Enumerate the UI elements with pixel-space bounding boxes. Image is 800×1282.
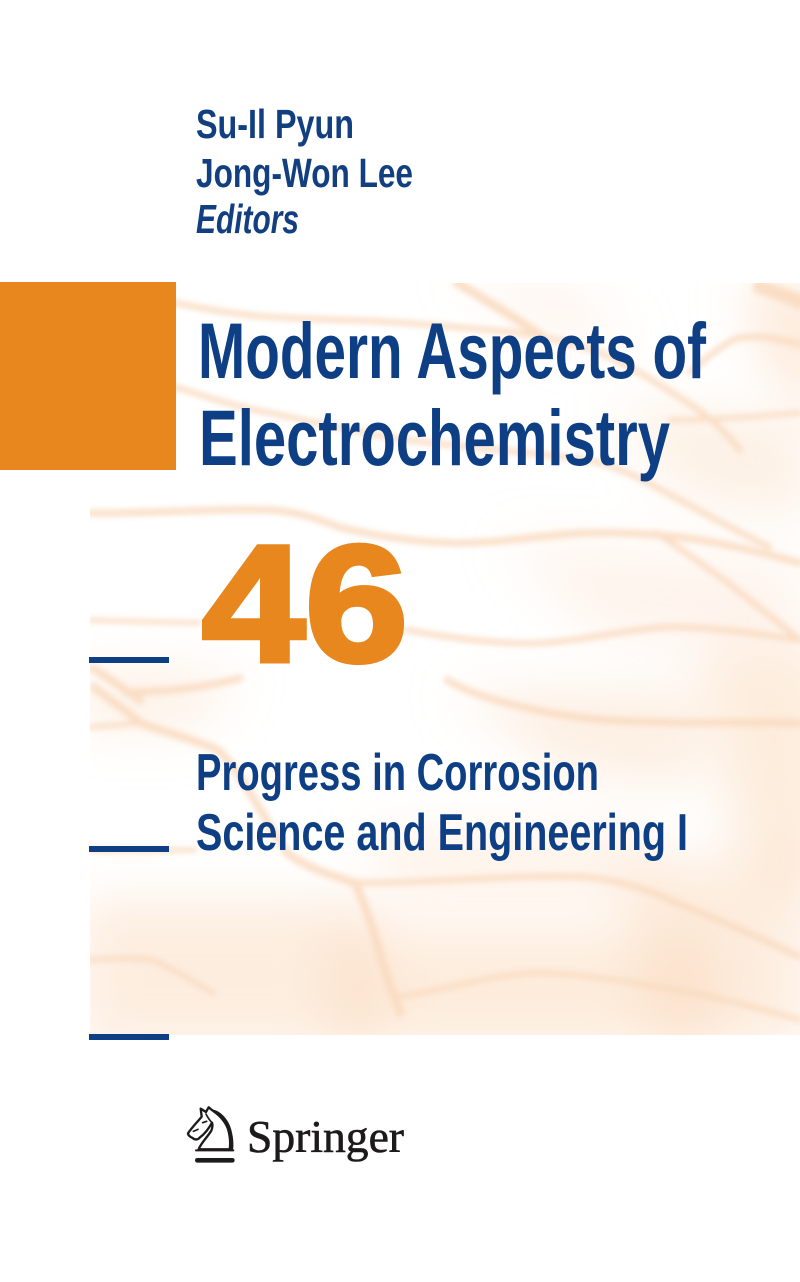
icon: Springer chess knight <box>188 1107 233 1160</box>
orange square <box>0 282 176 470</box>
blue rule 1 <box>89 657 169 663</box>
editor name: Su-Il Pyun: Su-Il Pyun <box>196 101 354 147</box>
editors block <box>196 101 413 242</box>
Springer logo <box>188 1107 404 1162</box>
blue rule 3 <box>89 1034 169 1040</box>
editors label: Editors <box>196 196 299 242</box>
editor name: Jong-Won Lee: Jong-Won Lee <box>196 150 413 196</box>
series title <box>198 306 706 482</box>
background: peach vein texture <box>80 270 800 1050</box>
volume number: 46 <box>202 512 408 697</box>
blue rule 2 <box>89 846 169 852</box>
volume subtitle <box>196 744 688 862</box>
subtitle line 1: Progress in Corrosion <box>196 744 599 802</box>
Springer wordmark: Springer <box>247 1112 404 1162</box>
